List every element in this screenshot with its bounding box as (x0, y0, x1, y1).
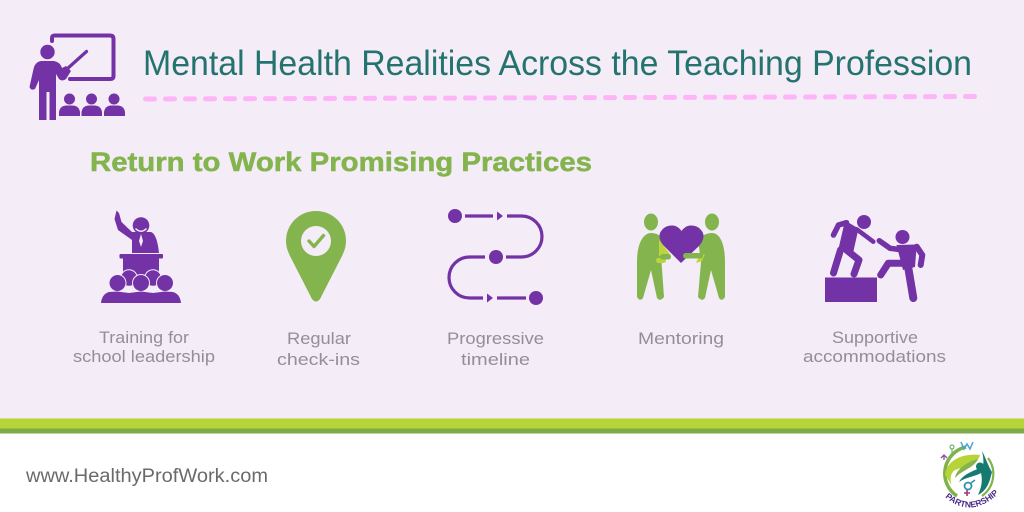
label: training for school leadership: Training for (99, 329, 190, 347)
practice: progressive timeline (447, 209, 544, 369)
label: regular check-ins: check-ins (277, 351, 360, 369)
icon: location pin with check mark (286, 211, 346, 302)
practice: supportive accommodations (803, 215, 946, 366)
title: Mental Health Realities Across the Teaching Profession (143, 44, 972, 83)
icon: speaker at podium with audience (101, 210, 181, 303)
footer band (0, 418, 1024, 512)
label: regular check-ins: Regular (287, 330, 352, 348)
footer website address: www.HealthyProfWork.com (25, 466, 268, 487)
practice: mentoring (637, 214, 725, 348)
icon: teacher at board with audience (30, 36, 125, 120)
practice: regular check-ins (277, 211, 360, 369)
label: mentoring: Mentoring (638, 330, 724, 348)
label: progressive timeline: timeline (461, 351, 530, 369)
practice: training for school leadership (73, 210, 215, 366)
logo: HPW Partnership (940, 442, 996, 508)
icon: person helping another climb a step (825, 215, 922, 302)
title dashed underline (146, 96, 975, 99)
label: training for school leadership: school leadership (73, 348, 215, 366)
icon: two people holding a heart (637, 214, 725, 300)
label: progressive timeline: Progressive (447, 330, 544, 348)
label: supportive accommodations: accommodations (803, 348, 946, 366)
label: supportive accommodations: Supportive (832, 329, 918, 347)
icon: winding timeline (448, 209, 543, 305)
logo wordmark: PARTNERSHIP (946, 490, 996, 508)
section heading: Return to Work Promising Practices (90, 147, 592, 177)
